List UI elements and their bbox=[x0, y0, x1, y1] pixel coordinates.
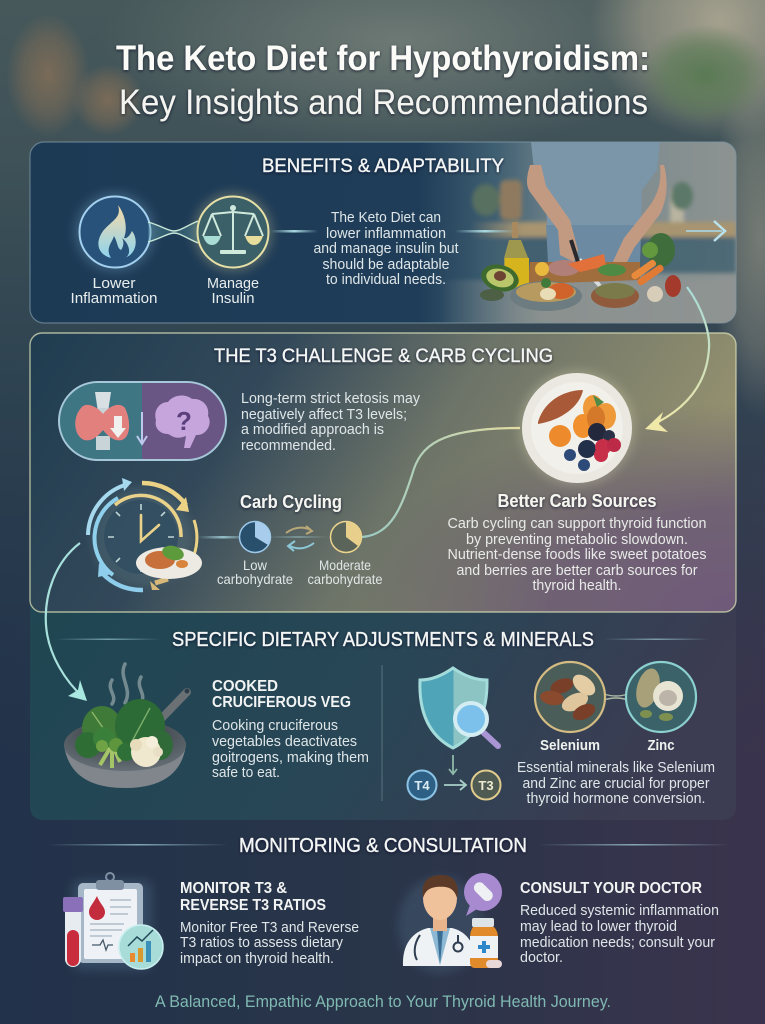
text: T3 challenge description: Long-term strict ketosis may bbox=[241, 390, 420, 407]
text: T3 challenge description: negatively affect T3 levels; bbox=[241, 406, 407, 423]
arrow: from clock to cooked vegetables bbox=[46, 543, 87, 701]
text: carb cycling title: Carb Cycling bbox=[240, 492, 342, 512]
labels: carbohydrate levels: Moderate bbox=[319, 557, 371, 573]
text: consult your doctor: medication needs; consult your bbox=[520, 934, 715, 951]
text: minerals description: thyroid hormone conversion. bbox=[526, 790, 706, 807]
icon: shield with magnifier and T4 to T3 conversion: T3 bbox=[478, 778, 494, 793]
text: benefits description: to individual needs. bbox=[326, 271, 446, 288]
heading: benefits and adaptability: BENEFITS & ADAPTABILITY bbox=[262, 156, 504, 177]
chart: low carbohydrate pie bbox=[240, 522, 270, 552]
section: monitoring and consultation bbox=[48, 835, 730, 973]
labels: carbohydrate levels: carbohydrate bbox=[308, 571, 383, 587]
title: The Keto Diet for Hypothyroidism: bbox=[116, 39, 650, 78]
icon: clock with carb cycle arrows bbox=[88, 478, 202, 590]
text: consult your doctor bbox=[520, 880, 719, 966]
icon: steaming pan of cooked vegetables bbox=[64, 664, 190, 788]
panel: dietary adjustments and minerals bbox=[30, 600, 736, 820]
text: cooked cruciferous veg bbox=[212, 678, 369, 781]
text: better carb sources: Carb cycling can support thyroid function bbox=[448, 515, 706, 532]
text: better carb sources: Nutrient-dense foods like sweet potatoes bbox=[448, 546, 706, 563]
labels: benefit names bbox=[70, 275, 259, 307]
text: minerals description: Essential minerals like Selenium bbox=[517, 759, 715, 776]
text: monitor T3 ratios: T3 ratios to assess dietary bbox=[180, 934, 343, 951]
text: better carb sources: and berries are better carb sources for bbox=[456, 562, 698, 579]
text: minerals description bbox=[517, 759, 715, 807]
text: monitor T3 ratios bbox=[180, 880, 359, 967]
text: benefits description: lower inflammation bbox=[326, 225, 446, 242]
text: monitor T3 ratios: MONITOR T3 & bbox=[180, 880, 287, 897]
labels: benefit names: Lower bbox=[92, 275, 136, 292]
text: better carb sources bbox=[448, 491, 706, 594]
text: monitor T3 ratios: Monitor Free T3 and Reverse bbox=[180, 919, 359, 936]
title bbox=[116, 39, 650, 122]
arrow: from food prep to better carb plate bbox=[645, 287, 709, 432]
text: consult your doctor: CONSULT YOUR DOCTOR bbox=[520, 880, 702, 897]
icon: lower inflammation flame bbox=[75, 192, 155, 272]
icons: selenium and zinc: Selenium bbox=[540, 737, 600, 754]
icon: thyroid and brain pill: ? bbox=[176, 406, 192, 436]
labels: carbohydrate levels: Low bbox=[243, 557, 268, 573]
text: consult your doctor: Reduced systemic inflammation bbox=[520, 902, 719, 919]
text: cooked cruciferous veg: Cooking cruciferous bbox=[212, 717, 338, 734]
text: benefits description: should be adaptable bbox=[322, 256, 450, 273]
icon: shield with magnifier and T4 to T3 conversion bbox=[408, 668, 500, 800]
text: cooked cruciferous veg: COOKED bbox=[212, 678, 278, 695]
icon: manage insulin scales bbox=[148, 192, 273, 272]
photo: person preparing keto food bbox=[440, 142, 736, 325]
text: benefits description: The Keto Diet can bbox=[331, 209, 441, 226]
text: better carb sources: Better Carb Sources bbox=[498, 491, 656, 511]
panel: benefits and adaptability bbox=[30, 142, 736, 325]
icon: cycle arrows bbox=[286, 526, 314, 551]
labels: benefit names: Inflammation bbox=[70, 290, 158, 307]
heading: T3 challenge: THE T3 CHALLENGE & CARB CYCLING bbox=[214, 346, 553, 367]
text: benefits description: and manage insulin but bbox=[314, 240, 459, 257]
text: better carb sources: by preventing metabolic slowdown. bbox=[466, 531, 688, 548]
text: cooked cruciferous veg: goitrogens, making them bbox=[212, 749, 369, 766]
text: T3 challenge description: recommended. bbox=[241, 437, 336, 454]
footer tagline: A Balanced, Empathic Approach to Your Thyroid Health Journey. bbox=[155, 992, 611, 1011]
title: Key Insights and Recommendations bbox=[119, 83, 648, 122]
icon: clipboard with test tube and chart bbox=[63, 873, 163, 970]
text: consult your doctor: may lead to lower thyroid bbox=[520, 918, 677, 935]
text: consult your doctor: doctor. bbox=[520, 949, 563, 966]
connector: carb cycling flow bbox=[198, 428, 520, 538]
text: cooked cruciferous veg: CRUCIFEROUS VEG bbox=[212, 694, 351, 711]
labels: carbohydrate levels: carbohydrate bbox=[217, 571, 293, 587]
text: monitor T3 ratios: REVERSE T3 RATIOS bbox=[180, 897, 326, 914]
icon: thyroid and brain pill bbox=[59, 382, 226, 460]
icon: shield with magnifier and T4 to T3 conversion: T4 bbox=[414, 778, 430, 793]
icon: doctor with medication bbox=[398, 873, 502, 973]
text: better carb sources: thyroid health. bbox=[532, 577, 622, 594]
heading: dietary adjustments: SPECIFIC DIETARY ADJUSTMENTS & MINERALS bbox=[172, 629, 594, 651]
text: T3 challenge description: a modified approach is bbox=[241, 421, 384, 438]
text: T3 challenge description bbox=[241, 390, 420, 454]
flow line with arrow bbox=[270, 221, 725, 241]
text: benefits description bbox=[314, 209, 459, 288]
labels: carbohydrate levels bbox=[217, 557, 383, 587]
heading: monitoring and consultation: MONITORING & CONSULTATION bbox=[239, 835, 527, 857]
text: monitor T3 ratios: impact on thyroid health. bbox=[180, 950, 334, 967]
labels: benefit names: Manage bbox=[207, 275, 259, 292]
text: cooked cruciferous veg: vegetables deactivates bbox=[212, 733, 357, 750]
text: cooked cruciferous veg: safe to eat. bbox=[212, 764, 280, 781]
panel: T3 challenge and carb cycling bbox=[30, 333, 736, 612]
icon: plate of sweet potatoes and berries bbox=[519, 370, 635, 486]
labels: benefit names: Insulin bbox=[212, 290, 254, 307]
icons: selenium and zinc: Zinc bbox=[648, 737, 674, 754]
chart: moderate carbohydrate pie bbox=[330, 522, 362, 552]
text: minerals description: and Zinc are crucial for proper bbox=[522, 775, 710, 792]
icons: selenium and zinc bbox=[535, 662, 696, 754]
